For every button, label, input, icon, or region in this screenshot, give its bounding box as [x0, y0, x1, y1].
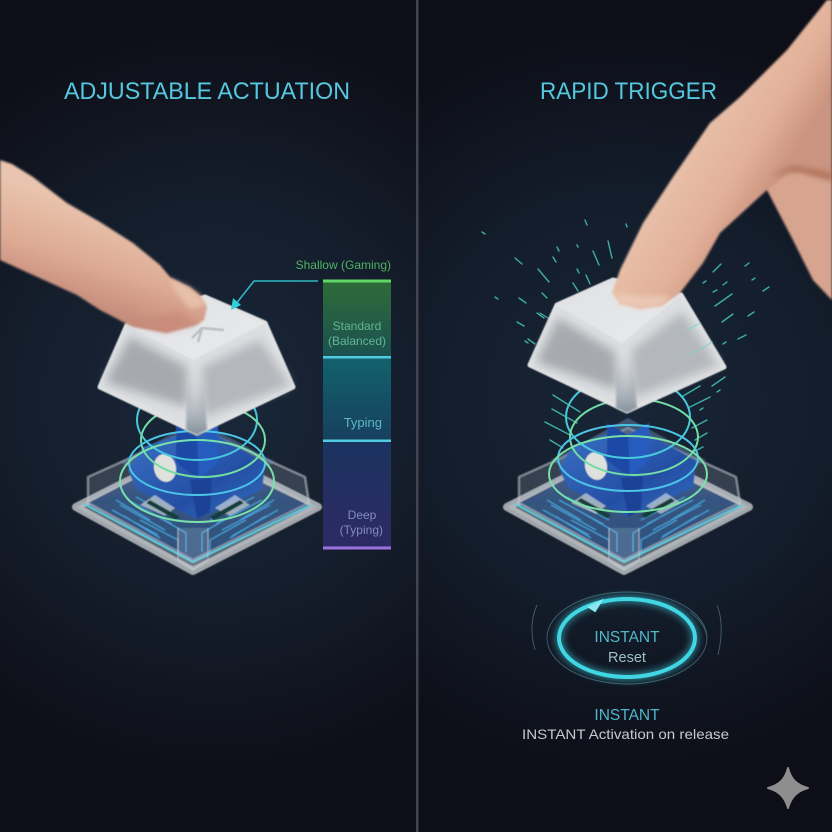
outer thin arcs	[532, 592, 721, 684]
segment: shallow to standard	[323, 281, 391, 357]
icon: sparkle watermark	[768, 768, 808, 808]
label: standard balanced: Standard	[333, 319, 381, 333]
right switch illustration	[482, 220, 769, 571]
glowing ring	[559, 599, 695, 677]
label: deep typing: (Typing)	[340, 523, 383, 537]
keycap	[530, 280, 724, 413]
electromagnetic rings	[549, 376, 707, 512]
label: deep: Deep	[348, 508, 377, 522]
label: shallow gaming: Shallow (Gaming)	[296, 258, 391, 272]
ring label: reset: Reset	[608, 650, 646, 666]
icon: right hand pressing key	[612, 0, 832, 309]
blue switch housing and stem	[551, 418, 706, 518]
segment: typing	[323, 357, 391, 441]
left switch illustration	[76, 297, 318, 571]
arrowhead	[589, 601, 601, 611]
electromagnetic rings	[120, 380, 274, 522]
caption: instant: INSTANT	[594, 707, 660, 724]
caption: instant activation on release: INSTANT Activation on release	[522, 726, 729, 742]
callout: instant reset ring	[532, 592, 721, 684]
switch base and circuit board	[76, 428, 318, 571]
panel: rapid trigger background	[416, 0, 832, 832]
icon: left finger pressing key	[0, 160, 207, 333]
label: typing: Typing	[344, 415, 382, 430]
blue switch housing and stem	[120, 420, 275, 520]
arrow: shallow level to keycap	[231, 281, 318, 310]
sparks over keycap	[540, 290, 712, 355]
segment: deep	[323, 441, 391, 548]
ring label: instant: INSTANT	[594, 629, 660, 646]
depth scale chart	[296, 258, 391, 550]
title: rapid trigger: RAPID TRIGGER	[540, 78, 717, 105]
switch base and circuit board	[507, 428, 749, 571]
keycap	[100, 297, 293, 435]
panel: adjustable actuation background	[0, 0, 416, 832]
label: balanced: (Balanced)	[328, 334, 386, 348]
motion spark lines	[482, 220, 769, 452]
title: adjustable actuation: ADJUSTABLE ACTUATION	[64, 78, 350, 105]
